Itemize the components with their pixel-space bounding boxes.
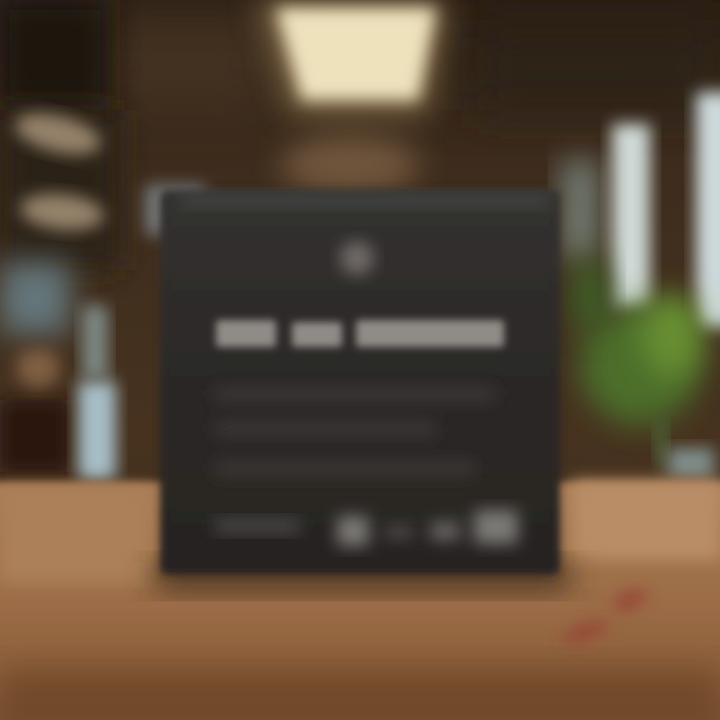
wooden table surface [0, 480, 720, 720]
board body text [215, 388, 495, 475]
left window and bottle [0, 262, 116, 480]
left shelves [0, 106, 120, 270]
board footer label [215, 518, 300, 534]
board icon [340, 241, 374, 275]
signboard [145, 185, 570, 590]
board heading [216, 320, 504, 347]
potted plant [570, 255, 714, 478]
red object on table [560, 585, 650, 647]
board buttons [337, 510, 518, 546]
ceiling light [255, 0, 450, 115]
right windows [562, 92, 720, 327]
